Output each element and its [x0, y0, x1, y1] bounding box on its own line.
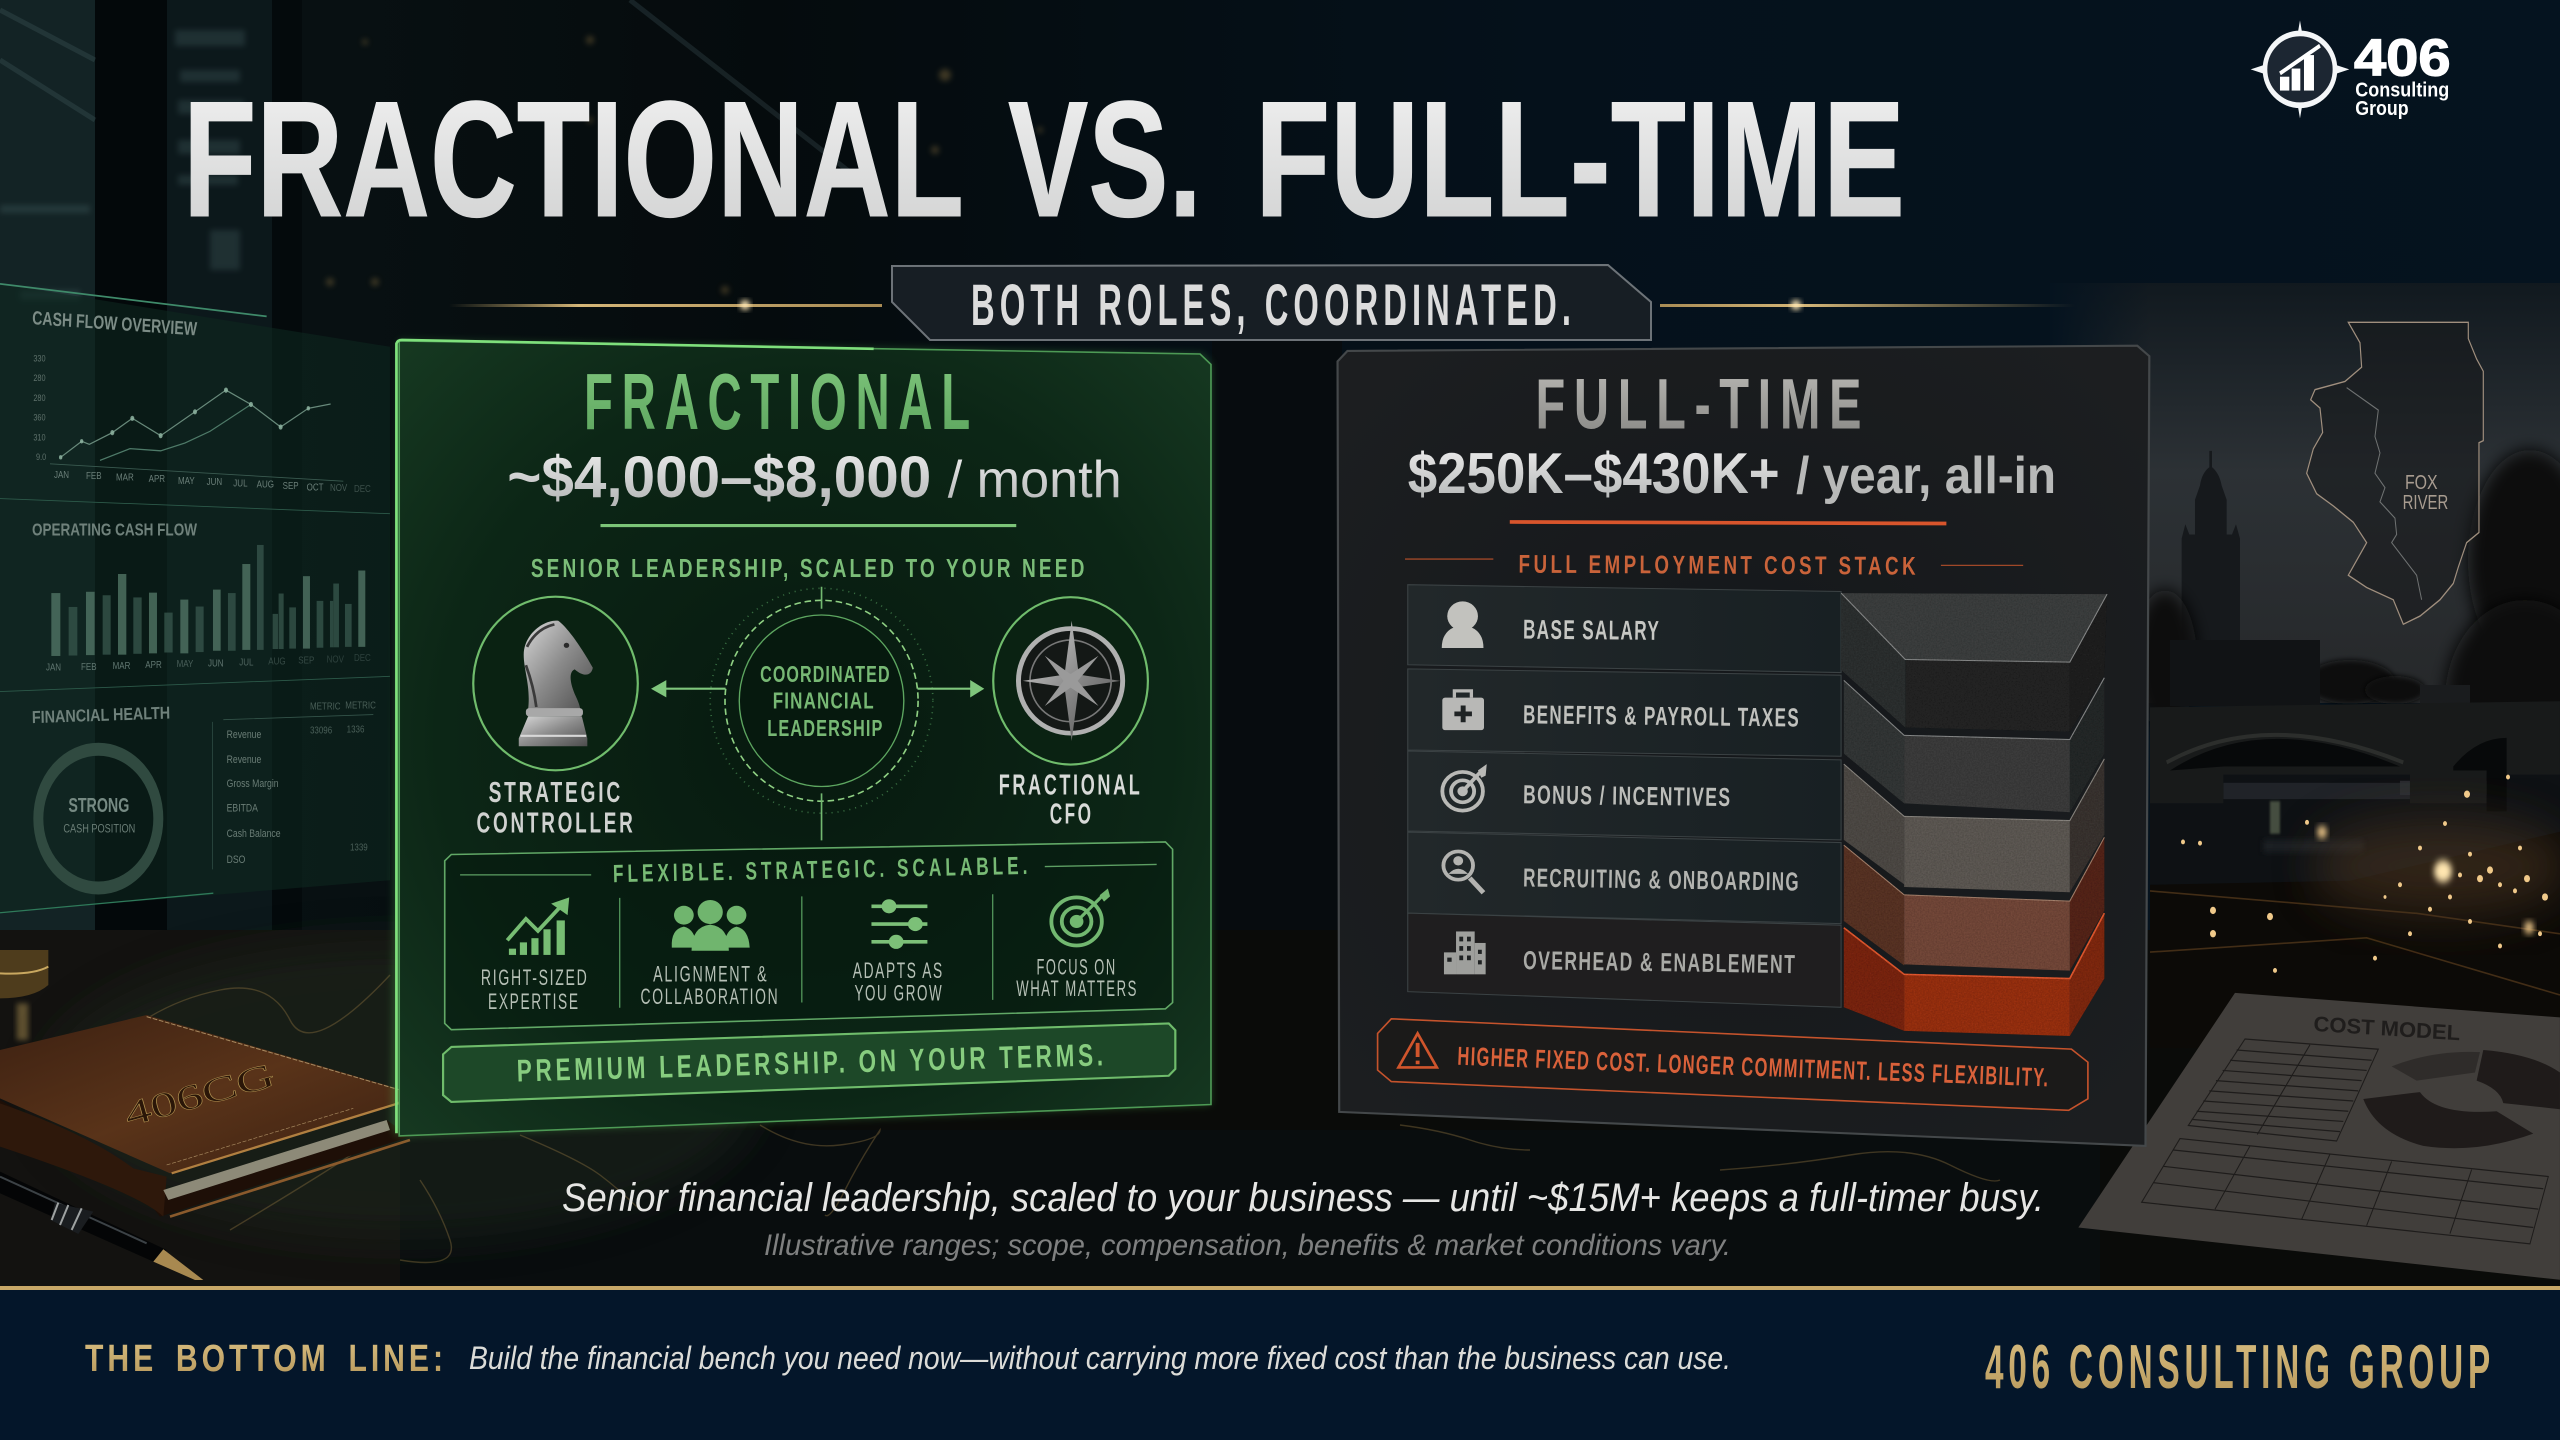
row: benefits and payroll taxes: BENEFITS & PAYROLL TAXES — [1523, 700, 1800, 732]
label: strategic controller: STRATEGIC — [489, 777, 623, 809]
subheading: cost stack: FULL EMPLOYMENT COST STACK — [1519, 549, 1919, 581]
label: focus on what matters — [1016, 955, 1138, 1001]
label: right-sized expertise — [481, 966, 588, 1014]
financial dashboard hologram: FINANCIAL HEALTH — [32, 704, 170, 728]
map: Illinois and Fox River: RIVER — [2403, 491, 2448, 514]
financial dashboard hologram: 1339 — [350, 842, 368, 853]
financial dashboard hologram: SEP — [283, 480, 299, 491]
financial dashboard hologram: DEC — [354, 652, 371, 663]
marble veins — [130, 975, 2000, 1262]
subheading: senior leadership: SENIOR LEADERSHIP, SCALED TO YOUR NEED — [531, 553, 1088, 583]
map: Illinois and Fox River: FOX — [2405, 470, 2438, 493]
panel: fractional — [392, 340, 1211, 1136]
financial dashboard hologram: JUL — [233, 477, 248, 489]
banner: premium leadership: PREMIUM LEADERSHIP. ON YOUR TERMS. — [516, 1037, 1107, 1088]
notebook — [0, 1015, 410, 1217]
financial dashboard hologram: MAR — [113, 660, 131, 671]
row: benefits and payroll taxes — [1408, 669, 1841, 756]
financial dashboard hologram: MAR — [116, 471, 134, 483]
financial dashboard hologram: Revenue — [227, 729, 262, 741]
financial dashboard hologram: Gross Margin — [227, 778, 279, 790]
banner: premium leadership — [443, 1023, 1175, 1102]
diagram: coordinated financial leadership: COORDINATED — [760, 661, 891, 687]
icon: compass role — [993, 597, 1148, 765]
icon: people — [672, 900, 750, 951]
financial dashboard hologram: AUG — [268, 656, 286, 667]
subtitle ribbon — [449, 265, 2075, 340]
row: base salary — [1408, 585, 1841, 673]
financial dashboard hologram: DSO — [227, 854, 246, 866]
financial dashboard hologram: JUN — [208, 657, 224, 669]
diagram: coordinated financial leadership: FINANCIAL — [773, 688, 875, 713]
financial dashboard hologram: Cash Balance — [227, 828, 281, 840]
price unit: per year: / year, all-in — [1796, 446, 2056, 505]
label: focus on what matters: FOCUS ON — [1037, 955, 1117, 979]
price: full-time: $250K–$430K+ — [1408, 442, 1780, 506]
title: VS. — [1008, 67, 1202, 251]
panel: full-time — [1338, 346, 2149, 1146]
financial dashboard hologram: MAY — [178, 475, 195, 486]
price unit: per month: / month — [948, 450, 1122, 508]
financial dashboard hologram: Revenue — [227, 754, 262, 766]
financial dashboard hologram: JUN — [207, 476, 222, 487]
financial dashboard hologram: NOV — [327, 654, 345, 665]
financial dashboard hologram: 1336 — [347, 724, 364, 735]
block 4 — [1844, 837, 2104, 971]
financial dashboard hologram: 33096 — [310, 725, 332, 736]
financial dashboard hologram: METRIC — [310, 700, 341, 712]
label: fractional cfo: CFO — [1050, 798, 1094, 830]
desk items — [0, 950, 2560, 1280]
financial dashboard hologram: 9.0 — [36, 451, 46, 462]
row: base salary: BASE SALARY — [1523, 614, 1660, 646]
logo wordmark: Consulting — [2355, 78, 2449, 101]
label: adapts as you grow: YOU GROW — [854, 981, 943, 1005]
label: adapts as you grow — [853, 958, 944, 1005]
financial dashboard hologram: OPERATING CASH FLOW — [32, 521, 197, 540]
financial dashboard hologram: AUG — [257, 479, 274, 490]
water and bridge — [2150, 701, 2560, 1048]
price: fractional: ~$4,000–$8,000 — [507, 444, 931, 509]
financial dashboard hologram: APR — [149, 473, 165, 484]
panel: flexible strategic scalable — [445, 842, 1173, 1030]
icon: sliders — [871, 901, 927, 947]
chart: cost stack blocks — [1841, 593, 2107, 1036]
row: bonus and incentives: BONUS / INCENTIVES — [1523, 780, 1732, 812]
label: alignment and collaboration — [641, 962, 779, 1009]
icon: warning triangle — [1398, 1033, 1437, 1067]
financial dashboard hologram: DEC — [354, 483, 371, 494]
cost model paper: COST MODEL — [2313, 1012, 2461, 1046]
financial dashboard hologram: MAY — [177, 658, 193, 669]
caption: Senior financial leadership, scaled to your business — until ~$15M+ keeps a full-timer busy. — [562, 1176, 2044, 1220]
financial dashboard hologram: 330 — [33, 353, 46, 364]
footer label: THE BOTTOM LINE: — [85, 1338, 447, 1380]
financial dashboard hologram: NOV — [330, 482, 348, 493]
label: adapts as you grow: ADAPTS AS — [853, 958, 944, 983]
logo wordmark: 406 — [2354, 29, 2451, 88]
pen — [0, 1172, 203, 1280]
financial dashboard hologram: OCT — [307, 481, 324, 493]
row: recruiting and onboarding: RECRUITING & ONBOARDING — [1523, 863, 1800, 896]
title: FULL-TIME — [1255, 67, 1905, 251]
title — [183, 67, 1905, 251]
block 1 — [1841, 593, 2107, 732]
financial dashboard hologram — [0, 284, 390, 913]
tree silhouettes and far buildings — [2133, 450, 2560, 800]
financial dashboard hologram: STRONG — [68, 794, 129, 817]
financial dashboard hologram: 280 — [33, 392, 46, 403]
footer message: Build the financial bench you need now—without carrying more fixed cost than the business can use. — [469, 1340, 1731, 1376]
diagram: coordinated financial leadership: LEADERSHIP — [767, 715, 884, 741]
icon: target — [1051, 889, 1110, 946]
label: fractional cfo: FRACTIONAL — [999, 769, 1142, 801]
block 3 — [1844, 759, 2104, 892]
financial dashboard hologram: APR — [145, 659, 162, 670]
financial dashboard hologram: 280 — [33, 372, 46, 383]
notebook: 406CG — [120, 1055, 279, 1134]
financial dashboard hologram: JAN — [46, 661, 61, 673]
label: fractional cfo — [999, 769, 1142, 830]
icon: growth chart — [507, 897, 569, 955]
footer bar — [0, 1286, 2560, 1440]
financial dashboard hologram: EBITDA — [227, 803, 258, 815]
icon: chess knight role — [473, 597, 638, 770]
logo wordmark — [2354, 29, 2451, 119]
subtitle ribbon: BOTH ROLES, COORDINATED. — [971, 273, 1576, 338]
logo — [2251, 20, 2451, 119]
row: overhead and enablement — [1408, 913, 1841, 1007]
riverside night scene — [2133, 450, 2560, 1048]
financial dashboard hologram: FEB — [86, 470, 102, 481]
financial dashboard hologram: FEB — [81, 661, 97, 672]
block 2 — [1844, 678, 2104, 812]
label: strategic controller: CONTROLLER — [477, 807, 636, 839]
row: recruiting and onboarding — [1408, 832, 1841, 924]
financial dashboard hologram: SEP — [298, 654, 314, 666]
logo mark: compass with chart — [2251, 20, 2349, 118]
row: bonus and incentives — [1408, 751, 1841, 840]
map: Illinois and Fox River — [2307, 322, 2483, 624]
label: focus on what matters: WHAT MATTERS — [1016, 977, 1138, 1001]
logo wordmark: Group — [2355, 96, 2409, 119]
label: strategic controller — [477, 777, 636, 839]
financial dashboard hologram: 310 — [33, 431, 46, 443]
financial dashboard hologram: METRIC — [345, 699, 376, 711]
sky backdrop — [2050, 283, 2560, 703]
block 5 — [1844, 913, 2104, 1036]
label: right-sized expertise: EXPERTISE — [488, 989, 580, 1014]
cost model paper — [2078, 993, 2560, 1280]
label: alignment and collaboration: COLLABORATION — [641, 985, 779, 1009]
label: alignment and collaboration: ALIGNMENT & — [653, 962, 768, 986]
diagram: coordinated financial leadership — [653, 587, 982, 840]
financial dashboard hologram: JUL — [239, 657, 254, 668]
warning callout: HIGHER FIXED COST. LONGER COMMITMENT. LESS FLEXIBILITY. — [1457, 1041, 2050, 1092]
financial dashboard hologram: JAN — [54, 469, 69, 480]
financial dashboard hologram: CASH POSITION — [63, 822, 135, 836]
panel: flexible strategic scalable: FLEXIBLE. STRATEGIC. SCALABLE. — [613, 852, 1032, 888]
heading: fractional: FRACTIONAL — [584, 358, 979, 446]
church tower — [2182, 451, 2240, 698]
brass paperweight — [0, 950, 48, 1040]
financial dashboard hologram: CASH FLOW OVERVIEW — [32, 307, 198, 340]
label: right-sized expertise: RIGHT-SIZED — [481, 966, 588, 990]
footnote: Illustrative ranges; scope, compensation, benefits & market conditions vary. — [764, 1229, 1731, 1262]
financial dashboard hologram: 360 — [33, 411, 46, 423]
row: overhead and enablement: OVERHEAD & ENABLEMENT — [1523, 946, 1796, 979]
sparkles — [2138, 775, 2560, 973]
title: FRACTIONAL — [183, 67, 964, 251]
warning callout — [1378, 1019, 2088, 1110]
heading: full-time: FULL-TIME — [1536, 365, 1870, 444]
